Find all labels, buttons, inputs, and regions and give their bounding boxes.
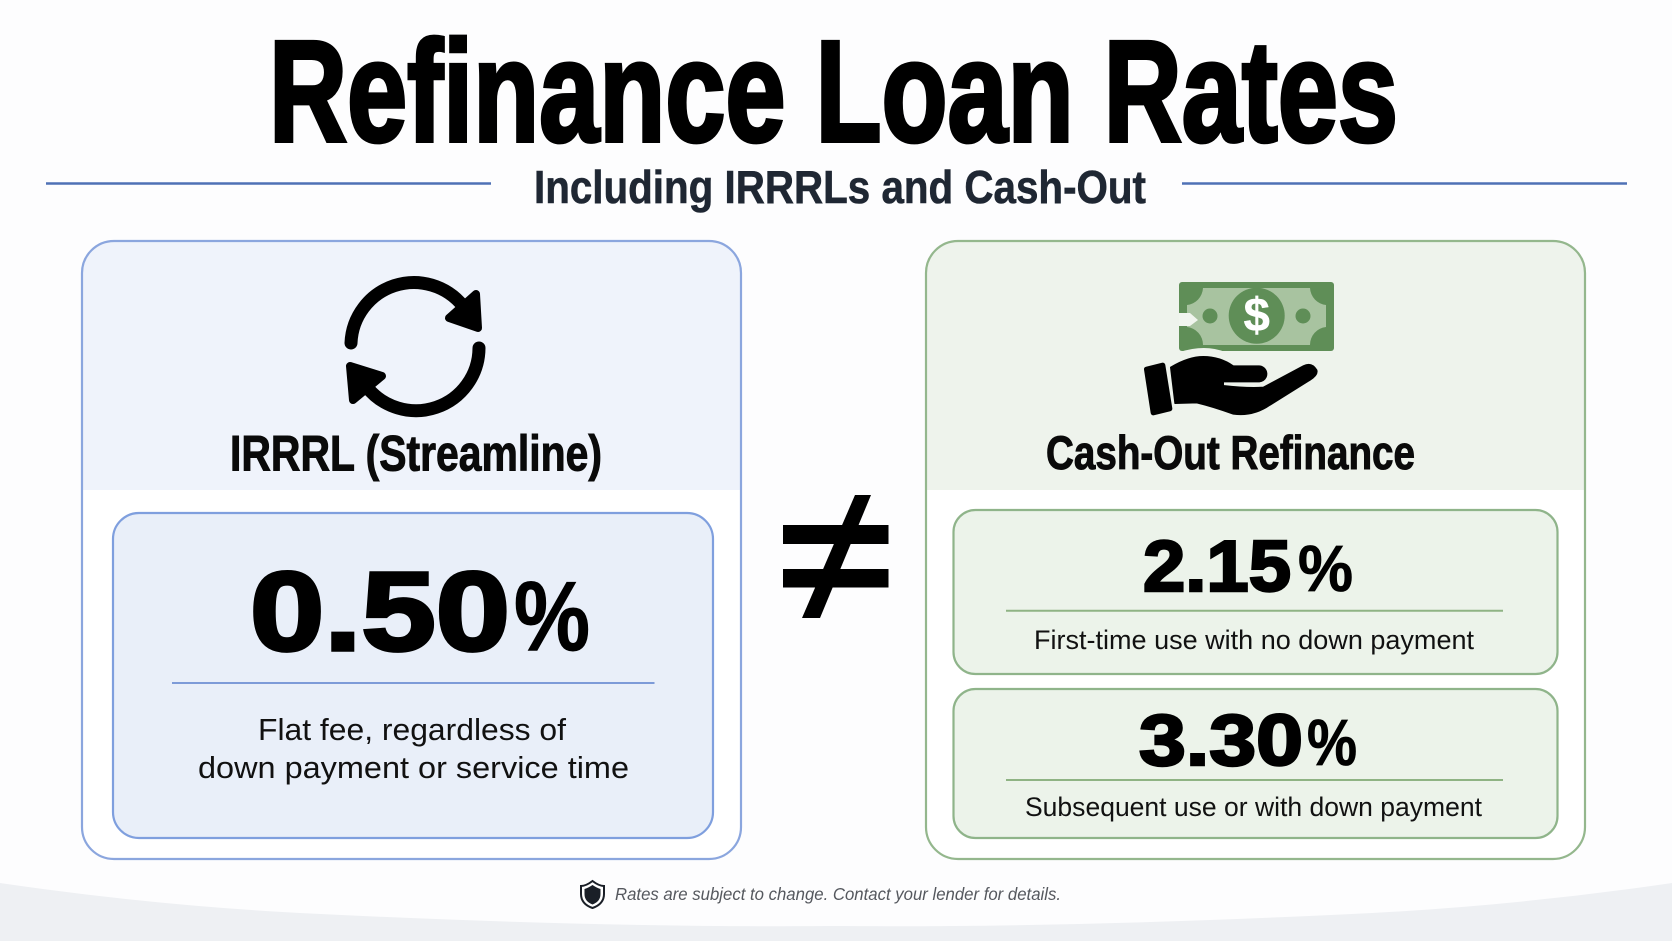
- disclaimer text: Rates are subject to change. Contact your lender for details.: [615, 884, 1061, 904]
- rate 3.30%: [1139, 701, 1357, 781]
- footer band: [0, 883, 1672, 941]
- rate 3.30%: %: [1307, 706, 1357, 779]
- panel: cash-out refinance: [926, 241, 1585, 859]
- card: 2.15%: [954, 510, 1558, 674]
- rate 3.30%: 3.30: [1139, 701, 1303, 781]
- rate 2.15%: [1143, 527, 1353, 607]
- divider: [1006, 610, 1503, 612]
- percent sign: %: [514, 561, 590, 671]
- not equal sign: [783, 495, 888, 618]
- heading: cash-out: Cash-Out Refinance: [1046, 426, 1415, 479]
- icon: banknote: $: [1244, 288, 1270, 341]
- subtitle with rules: Including IRRRLs and Cash-Out: [534, 161, 1146, 213]
- icon: refresh arrows: [350, 283, 479, 411]
- rate 0.50%: 0.50: [250, 549, 510, 674]
- rate 2.15%: %: [1298, 532, 1353, 605]
- divider: [172, 682, 654, 684]
- card: flat fee: [113, 513, 713, 838]
- description: down payment or service time: [198, 750, 629, 785]
- icon: banknote: [1179, 282, 1334, 352]
- footer note: [581, 881, 1061, 908]
- description: [198, 712, 629, 785]
- panel: IRRRL streamline: [82, 241, 741, 859]
- description: Flat fee, regardless of: [258, 712, 566, 747]
- heading: IRRRL: IRRRL (Streamline): [230, 426, 602, 482]
- icon: open hand: [1147, 357, 1317, 414]
- description: First-time use with no down payment: [1034, 625, 1475, 655]
- description: Subsequent use or with down payment: [1025, 792, 1483, 822]
- divider: [1006, 779, 1503, 781]
- rate 2.15%: 2.15: [1143, 527, 1291, 607]
- card: 3.30%: [954, 689, 1558, 838]
- icon: shield: [581, 881, 604, 908]
